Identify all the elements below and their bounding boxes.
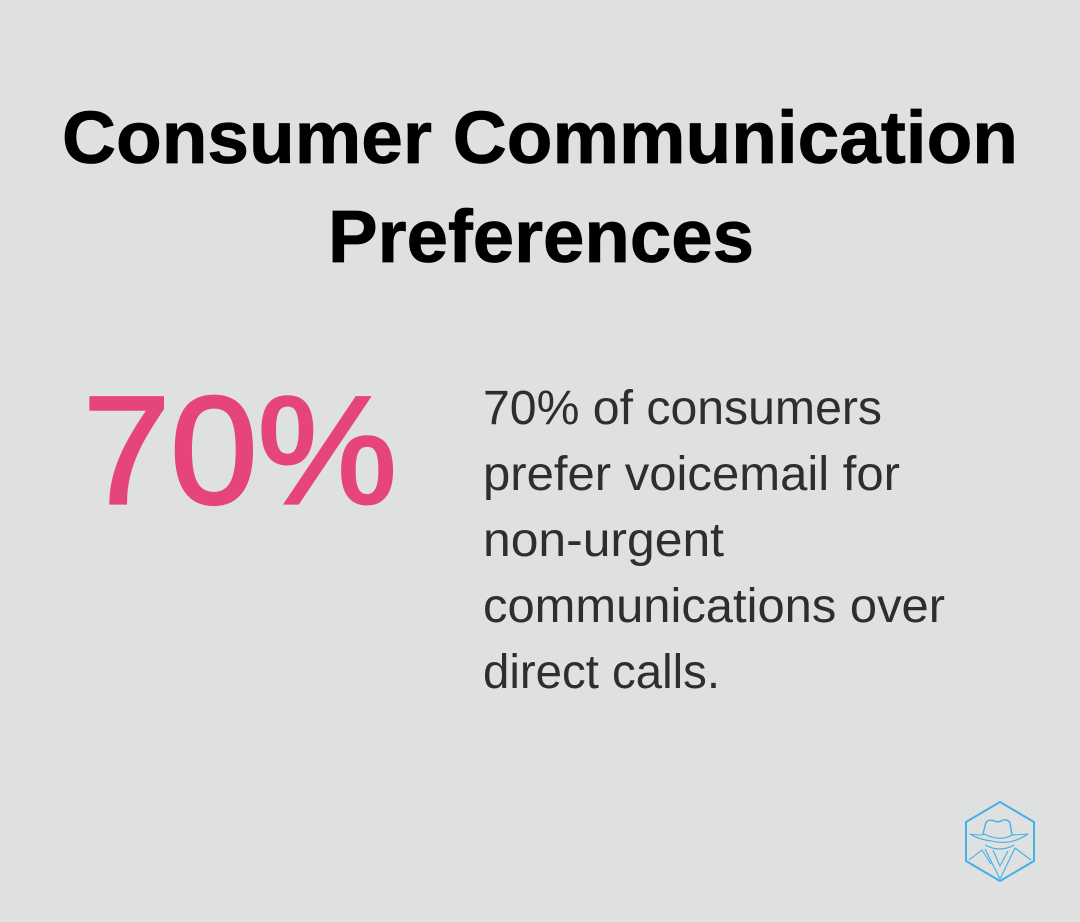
title: Consumer Communication [62, 96, 1018, 179]
description text: communications over [483, 580, 945, 633]
description text: prefer voicemail for [483, 448, 900, 501]
big statistic: 70%: 70% [83, 365, 397, 536]
description text [483, 382, 945, 699]
icon: hexagon logo with hat and coat [966, 802, 1034, 881]
description text: 70% of consumers [483, 382, 882, 435]
description text: non-urgent [483, 514, 724, 567]
title: Preferences [328, 195, 754, 278]
description text: direct calls. [483, 646, 720, 699]
title [62, 96, 1018, 278]
